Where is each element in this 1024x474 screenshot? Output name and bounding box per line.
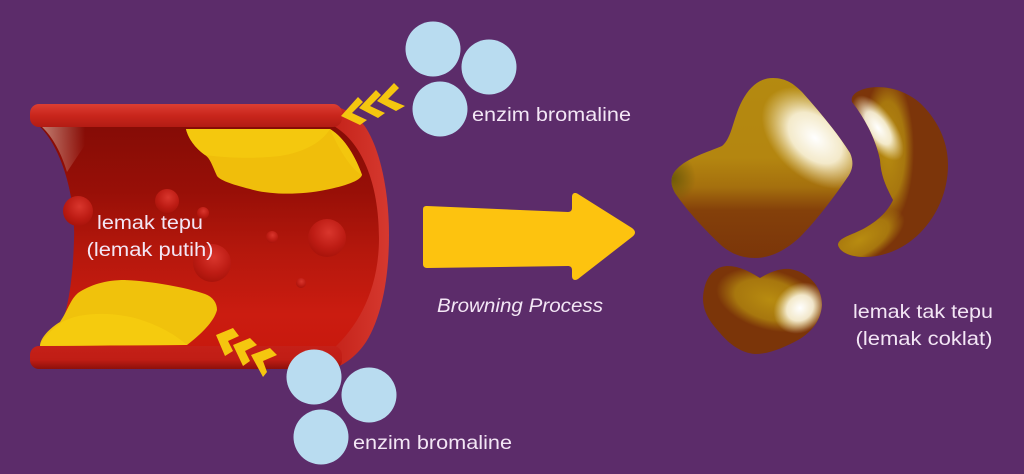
brown fat blob: crescent xyxy=(838,87,948,257)
enzyme label: bottom: enzim bromaline xyxy=(353,432,512,454)
label: lemak tak tepu: lemak tak tepu xyxy=(853,301,993,323)
label: lemak tepu: (lemak putih) xyxy=(86,240,214,261)
enzyme label: top: enzim bromaline xyxy=(472,104,631,126)
enzyme cluster: top xyxy=(406,22,516,136)
arrow label: Browning Process xyxy=(437,296,604,317)
label: lemak tepu xyxy=(86,213,214,261)
arrow: browning process xyxy=(423,193,635,280)
chevrons: top xyxy=(341,83,405,125)
enzyme cluster: bottom xyxy=(286,350,396,464)
blood vessel illustration xyxy=(30,104,389,369)
wall top-left highlight xyxy=(41,126,85,172)
brown fat blob: large xyxy=(671,78,852,258)
label: lemak tak tepu xyxy=(853,301,993,350)
top lip of vessel xyxy=(30,104,342,127)
bottom lip of vessel xyxy=(30,346,342,369)
fatty plaque: bottom xyxy=(40,280,217,346)
chevrons: bottom xyxy=(216,328,277,377)
vessel outer right rim xyxy=(330,105,389,369)
brown fat blob: heart xyxy=(703,266,822,354)
fatty plaque: top xyxy=(186,129,362,194)
label: lemak tak tepu: (lemak coklat) xyxy=(856,328,992,350)
label: lemak tepu: lemak tepu xyxy=(97,213,203,234)
vessel inner wall xyxy=(38,125,379,348)
red blood spheres xyxy=(63,189,346,288)
